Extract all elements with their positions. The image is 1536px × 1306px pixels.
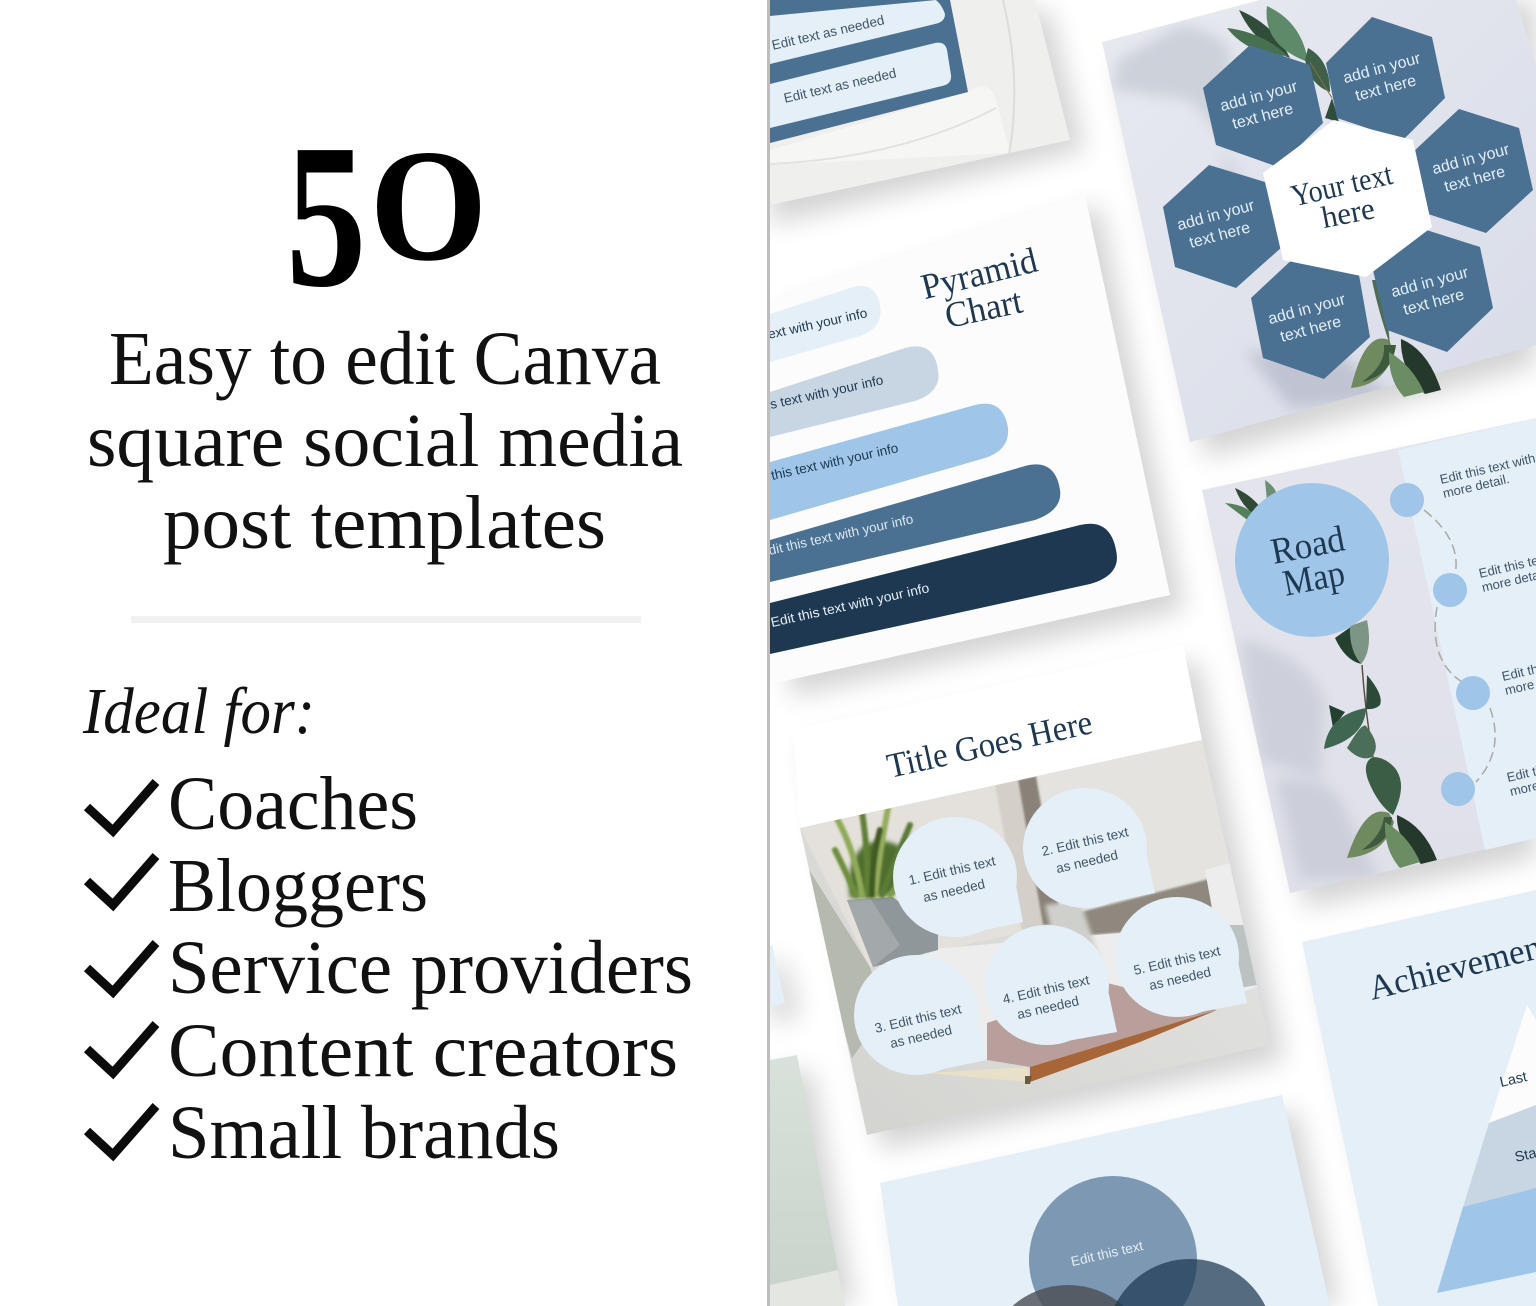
heading (920, 247, 1039, 326)
hexagon 2: text here (1354, 72, 1418, 105)
panel: road map template (1202, 418, 1536, 893)
hexagon 5: add in your (1266, 291, 1348, 328)
headline text: post templates (163, 481, 606, 565)
tier 4: Edit this text with your info (758, 511, 915, 560)
hexagon 1 (1203, 45, 1323, 167)
triangle middle tier (1463, 1105, 1536, 1207)
panel: hexagon template (1102, 0, 1536, 442)
venn circle left (1012, 1285, 1124, 1306)
tier 5: Edit this text with your info (769, 580, 931, 630)
road map circle heading: Map (1279, 553, 1348, 605)
card shadows (770, 0, 1536, 1306)
bubble 4: 4. Edit this text (1001, 972, 1091, 1007)
triangle top tier (1489, 1005, 1536, 1123)
bubble 2: 2. Edit this text (1040, 824, 1130, 859)
dashed route (1424, 510, 1495, 782)
triangle base tier (1437, 1188, 1536, 1293)
panel: achievement template (1302, 890, 1536, 1306)
milestone 3 (1456, 664, 1536, 710)
template collage (712, 0, 1536, 1306)
milestone 4 (1441, 766, 1536, 806)
list row 2: Edit text as needed (782, 65, 898, 106)
milestone 1: Edit this text with (1438, 450, 1536, 487)
audience list (87, 762, 693, 1175)
icon: eucalyptus vine (1324, 620, 1437, 868)
bubble 4: as needed (1016, 993, 1080, 1022)
headline number 50: 0 (370, 120, 487, 293)
center hexagon: Your text (1288, 156, 1396, 213)
bubble 2: as needed (1055, 847, 1119, 876)
tier 1 (770, 286, 880, 362)
hexagon 1: add in your (1218, 78, 1300, 115)
bubble 1: as needed (922, 876, 986, 905)
panel: green photo card (770, 1055, 845, 1306)
tier 1: Edit this text with your info (712, 305, 869, 354)
item: content creators: Content creators (168, 1009, 678, 1093)
center hexagon: here (1318, 190, 1378, 235)
bubble 1 (893, 817, 1023, 937)
hexagon 6: text here (1188, 219, 1252, 252)
list row 1: Edit text as needed (770, 12, 886, 53)
hexagon 3: text here (1443, 163, 1507, 196)
headline text (87, 317, 683, 565)
triangle top tier: Last (1498, 1069, 1529, 1091)
hexagon 2 (1326, 17, 1445, 140)
panel: small cropped blue card (770, 945, 785, 1007)
bubble 4 (985, 925, 1117, 1045)
panel: list template on chair photo (770, 0, 1070, 205)
item: bloggers: Bloggers (168, 844, 428, 928)
hexagon 5 (1251, 255, 1370, 379)
bubble 5: as needed (1148, 964, 1212, 993)
hexagon 6: add in your (1175, 197, 1257, 234)
bubble 2 (1023, 788, 1155, 908)
headline number 50 (286, 101, 487, 330)
road map circle heading: Road (1268, 518, 1348, 573)
ideal for heading: Ideal for: (82, 675, 315, 748)
venn circle top: Edit this text (1069, 1238, 1145, 1269)
tier 2 (770, 346, 938, 437)
bubble 1: 1. Edit this text (907, 853, 997, 888)
left panel background (0, 0, 768, 1306)
hexagon 3: add in your (1430, 141, 1512, 178)
icon: leaves top (1227, 6, 1339, 122)
icon: leaves bottom (1351, 280, 1441, 397)
tier 2: Edit this text with your info (728, 372, 885, 421)
tier 4 (758, 464, 1060, 582)
milestone 1: more detail. (1441, 471, 1511, 501)
heading: Chart (941, 281, 1026, 336)
heading: Title Goes Here (883, 702, 1096, 786)
divider (131, 616, 641, 623)
headline number 50: 5 (286, 101, 366, 330)
panel: pyramid chart (770, 204, 1170, 681)
tier 3: Edit this text with your info (743, 440, 900, 489)
list row 2 (770, 43, 951, 128)
bubble 5 (1115, 897, 1247, 1017)
bubble 3: 3. Edit this text (873, 1001, 963, 1036)
center hexagon (1263, 120, 1432, 277)
headline text: square social media (87, 399, 683, 483)
vertical separator (767, 0, 770, 1306)
headline text: Easy to edit Canva (109, 317, 661, 401)
item: coaches: Coaches (168, 762, 418, 846)
bubble 5: 5. Edit this text (1132, 943, 1222, 978)
panel: venn template (880, 1095, 1330, 1306)
hexagon 4: text here (1402, 286, 1466, 319)
road map circle heading (1235, 483, 1389, 637)
icon: leaves top (1225, 480, 1278, 522)
item: small brands: Small brands (168, 1091, 560, 1175)
hexagon 2: add in your (1341, 50, 1423, 87)
bubble 3: as needed (889, 1022, 953, 1051)
tier 3 (743, 404, 1008, 520)
heading: Pyramid (917, 240, 1041, 307)
desk photo (800, 740, 1270, 1135)
hexagon 5: text here (1279, 313, 1343, 346)
tier 5 (769, 524, 1117, 654)
hexagon 4 (1373, 228, 1493, 352)
hexagon 6 (1163, 165, 1282, 288)
venn circle top (1029, 1176, 1197, 1306)
item: service providers: Service providers (168, 926, 693, 1010)
list row 1 (770, 0, 945, 64)
hexagon 1: text here (1231, 100, 1295, 133)
bubble 3 (854, 955, 987, 1075)
venn circle right (1115, 1259, 1265, 1306)
hexagon 3 (1413, 109, 1533, 233)
milestone 2 (1433, 558, 1536, 607)
hexagon 4: add in your (1389, 264, 1471, 301)
milestone 1 (1390, 450, 1536, 517)
panel: title goes here template (793, 645, 1270, 1135)
